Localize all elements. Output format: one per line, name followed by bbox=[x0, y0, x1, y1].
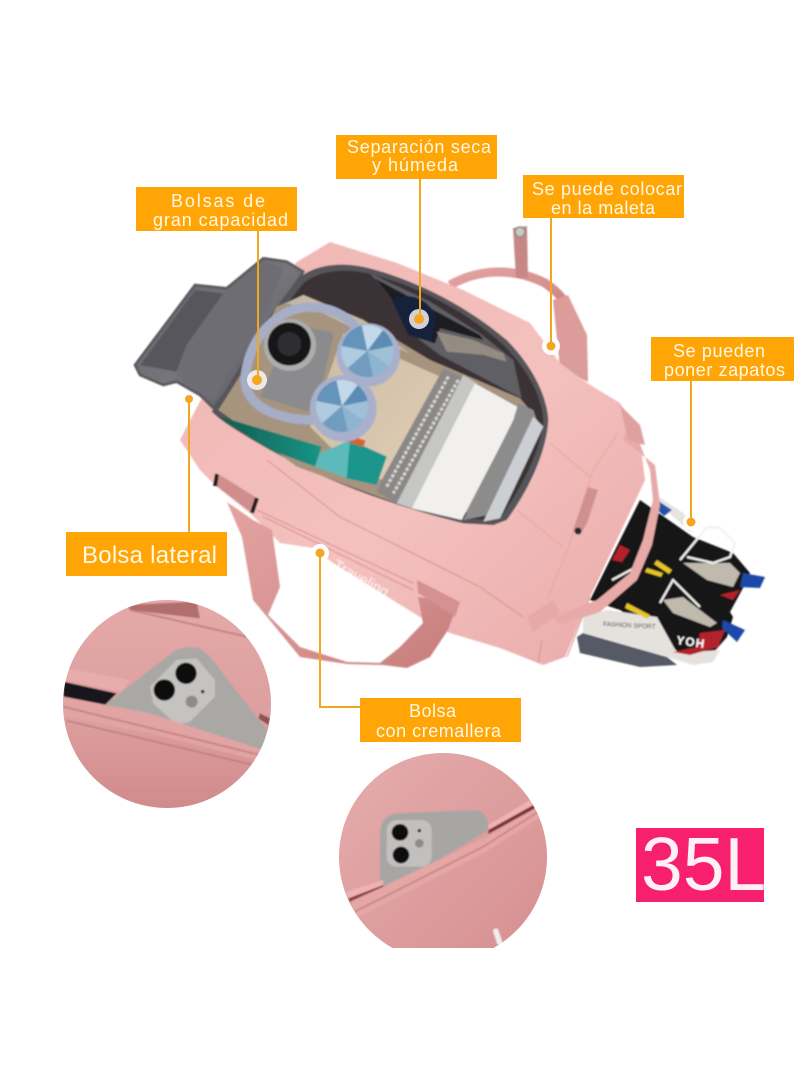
callout: Bolsas de gran capacidad: gran capacidad bbox=[153, 210, 288, 230]
badge: 35L capacity: 35L bbox=[641, 822, 766, 906]
shoe brand text: FASHION SPORT bbox=[603, 621, 656, 631]
tablet bbox=[310, 333, 440, 480]
callout: Bolsa con cremallera bbox=[311, 544, 521, 742]
product logo text: Traveling bbox=[330, 557, 392, 601]
headphones band bbox=[245, 307, 360, 420]
top handle and tab bbox=[450, 226, 588, 382]
interior floor bbox=[218, 295, 530, 517]
headphone cup bottom bbox=[310, 375, 377, 442]
callout: Bolsa lateral bbox=[66, 395, 227, 576]
mesh pocket bbox=[370, 273, 522, 398]
callout: Se pueden poner zapatos bbox=[651, 337, 794, 530]
callout: Se puede colocar en la maleta bbox=[523, 175, 684, 355]
callout: Separación seca y húmeda: Separación seca bbox=[347, 137, 492, 157]
striped book bbox=[377, 368, 467, 503]
seams bbox=[257, 433, 618, 663]
circle detail: horizontal zip pocket with phone bbox=[60, 597, 273, 810]
zipper pull bbox=[573, 487, 598, 535]
bag body bbox=[180, 242, 645, 665]
front handle bbox=[215, 474, 460, 668]
callout: Se pueden poner zapatos: Se pueden bbox=[673, 341, 765, 361]
callout: Se pueden poner zapatos: poner zapatos bbox=[664, 360, 785, 380]
bag opening bbox=[212, 265, 548, 525]
side handle bbox=[553, 405, 660, 625]
open flap bbox=[135, 258, 303, 408]
teal bottle bbox=[218, 417, 322, 467]
white sheet bbox=[412, 383, 520, 520]
circle detail: diagonal zip pocket with phone bbox=[339, 753, 547, 948]
callout: Bolsa lateral: Bolsa lateral bbox=[82, 542, 217, 569]
callout: Bolsas de gran capacidad: Bolsas de bbox=[171, 191, 265, 211]
callout: Bolsas de gran capacidad bbox=[136, 187, 297, 390]
bag photo bbox=[135, 226, 765, 668]
callout: Separación seca y húmeda bbox=[336, 135, 497, 329]
callout: Se puede colocar en la maleta: en la maleta bbox=[551, 198, 656, 218]
camera bbox=[260, 323, 333, 412]
laptop bbox=[397, 375, 477, 508]
callout: Separación seca y húmeda: y húmeda bbox=[372, 155, 459, 175]
callout: Se puede colocar en la maleta: Se puede colocar bbox=[532, 179, 682, 199]
grey lining bbox=[463, 403, 537, 520]
shoe logo text: YOH bbox=[676, 633, 706, 651]
headphone cup top bbox=[337, 323, 400, 387]
callout: Bolsa con cremallera: Bolsa bbox=[409, 701, 457, 721]
callout: Bolsa con cremallera: con cremallera bbox=[376, 721, 502, 741]
shoes bbox=[577, 493, 765, 667]
stitched corner bbox=[527, 600, 560, 632]
